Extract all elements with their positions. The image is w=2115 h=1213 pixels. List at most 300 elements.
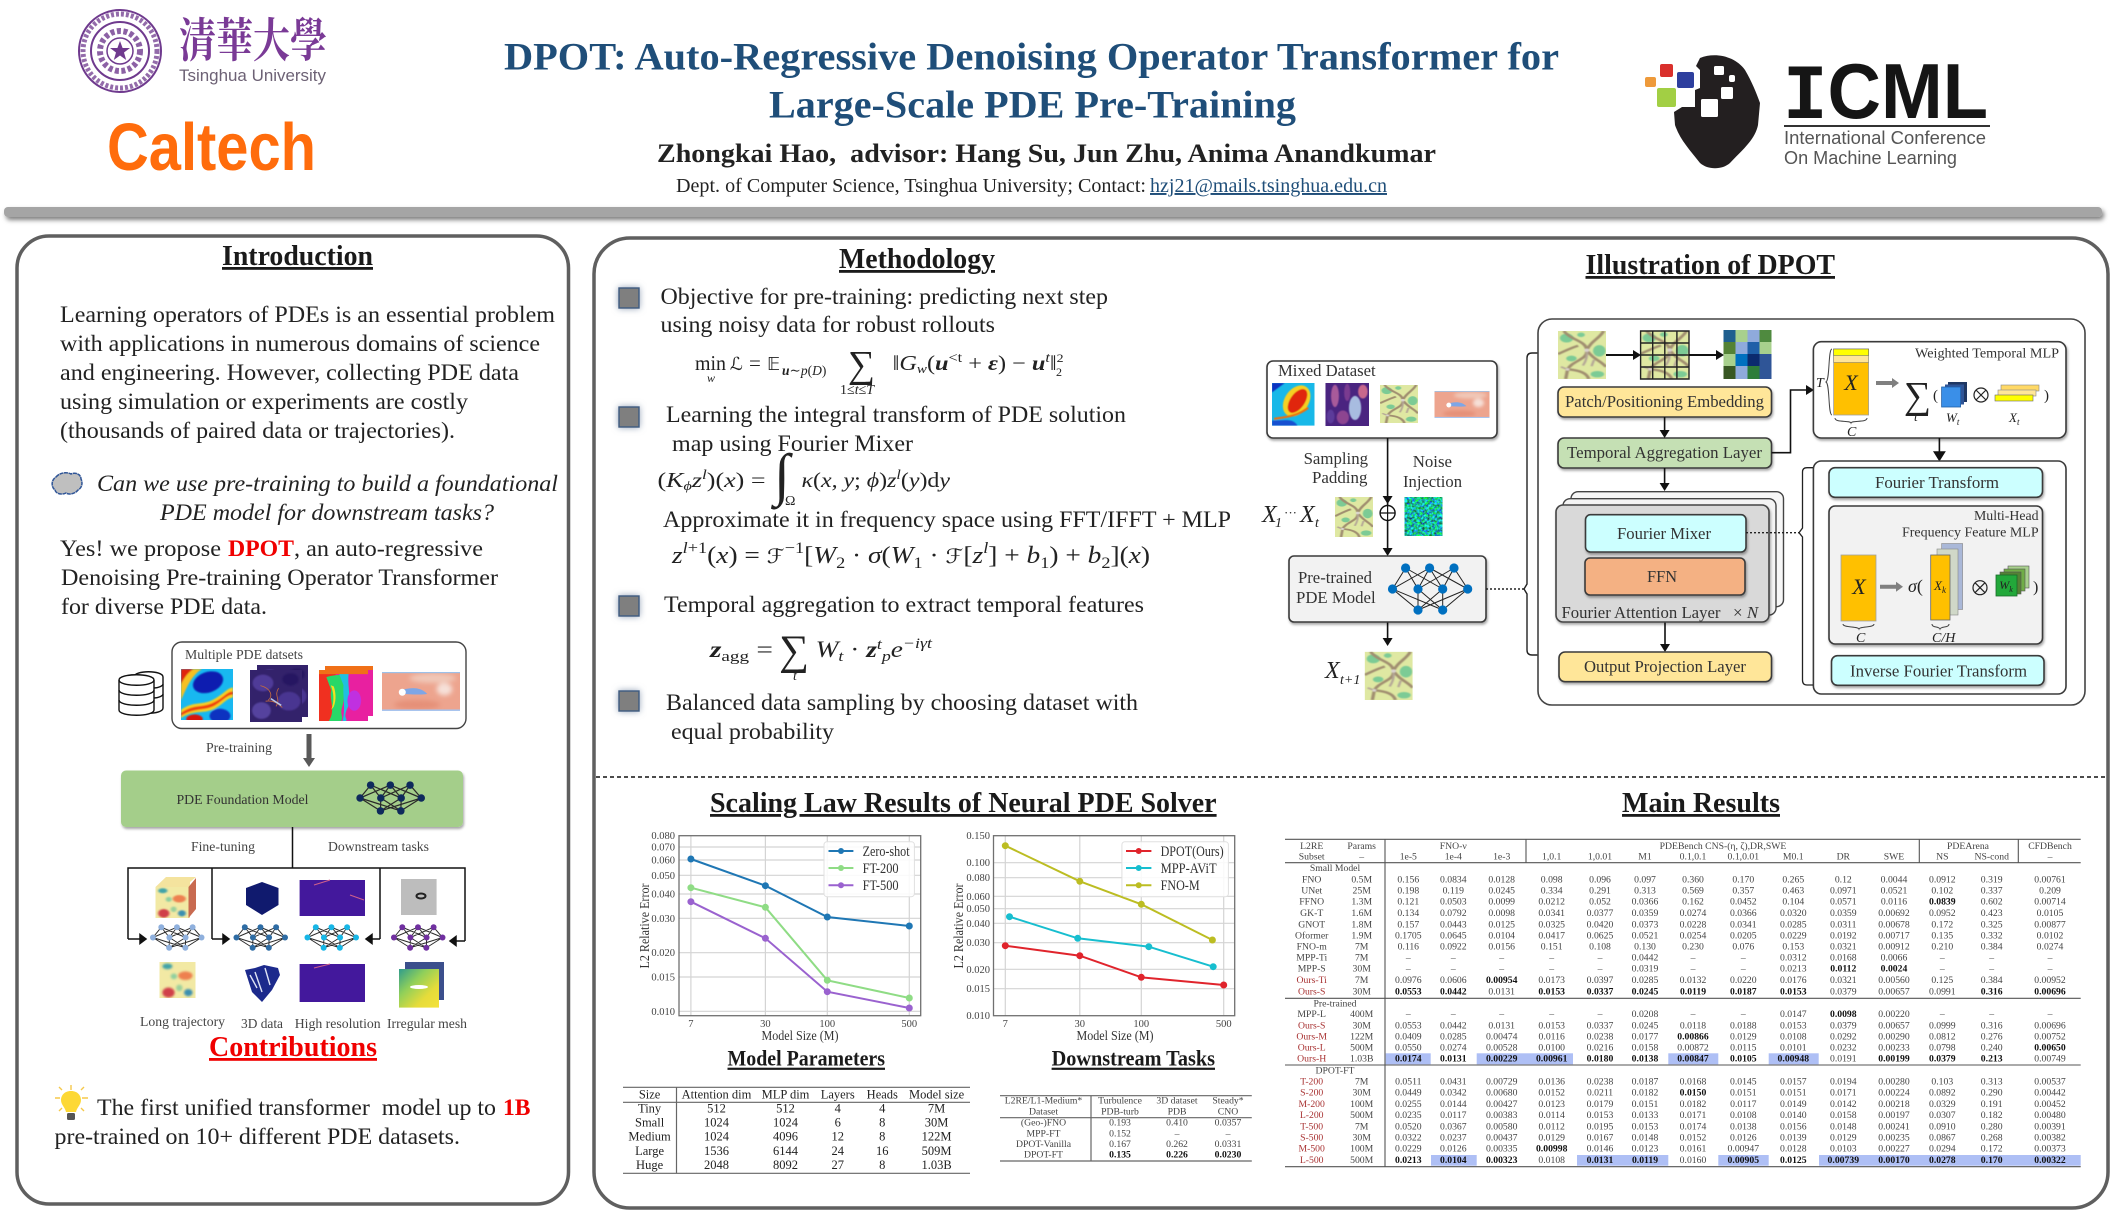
equation: training objective: ( bbox=[927, 351, 935, 375]
line chart: model size vs error, comparison: 0.100 bbox=[966, 858, 990, 869]
table: main results: 0.00322 bbox=[2034, 1155, 2066, 1166]
table: main results: 0.00323 bbox=[1486, 1155, 1518, 1166]
table: main results: 0.0176 bbox=[1780, 975, 1807, 986]
table: main results: 0.0151 bbox=[1780, 1088, 1807, 1099]
box: multi-head frequency feature MLP: C/H bbox=[1932, 631, 1956, 646]
equation: Fourier mixer: ( bbox=[707, 543, 716, 569]
text: research question: PDE model for downstream tasks? bbox=[159, 500, 494, 526]
equation: training objective: ε) − u bbox=[988, 351, 1044, 375]
table: main results: 0.157 bbox=[1397, 919, 1419, 930]
legend: DPOT(Ours) bbox=[1161, 844, 1224, 860]
logo: Caltech: Caltech bbox=[107, 110, 316, 185]
table: main results: 0.0245 bbox=[1488, 886, 1515, 897]
table: main results: 0.0521 bbox=[1881, 886, 1907, 897]
table: main results: 0.153 bbox=[1782, 942, 1804, 953]
table: main results: 0.0238 bbox=[1587, 1077, 1613, 1088]
box: multi-head frequency feature MLP: k bbox=[2009, 585, 2013, 594]
line chart: model size vs error, DPOT variants: 0.020 bbox=[651, 948, 675, 959]
table: main results: 0.325 bbox=[1981, 919, 2003, 930]
box: multi-head frequency feature MLP: W bbox=[1999, 578, 2009, 592]
table: main results: 0.0105 bbox=[2037, 908, 2063, 919]
table: main results: 7M bbox=[1355, 942, 1369, 953]
table: main results: 0.00580 bbox=[1486, 1121, 1518, 1132]
line chart: model size vs error, comparison: 0.080 bbox=[966, 873, 990, 884]
table: main results: 0.0153 bbox=[1538, 986, 1565, 997]
table: main results: 0.0212 bbox=[1538, 897, 1565, 908]
table: main results: 0.0645 bbox=[1440, 931, 1467, 942]
text block: introduction: and engineering. However, collecting PDE data bbox=[60, 360, 520, 386]
task: high resolution: High resolution bbox=[295, 1017, 381, 1032]
table: model parameters: 509M bbox=[922, 1144, 952, 1158]
table: main results: 0.0171 bbox=[1680, 1110, 1706, 1121]
table: main results: 0.0322 bbox=[1395, 1132, 1422, 1143]
box: multi-head frequency feature MLP: ) bbox=[2033, 579, 2038, 596]
table: main results: 0.0129 bbox=[1538, 1132, 1565, 1143]
box: output projection layer: Output Projection Layer bbox=[1584, 657, 1746, 676]
equation: Fourier mixer: 1 bbox=[1040, 555, 1049, 572]
table: main results: 0.172 bbox=[1931, 919, 1953, 930]
table: main results: 1.8M bbox=[1351, 919, 1372, 930]
table: main results: 0.00391 bbox=[2034, 1121, 2066, 1132]
table: main results: 0.0153 bbox=[1538, 1020, 1565, 1031]
table: main results: 0.0133 bbox=[1632, 1110, 1658, 1121]
table: main results: 0.00678 bbox=[1878, 919, 1910, 930]
table: downstream tasks: Turbulence bbox=[1098, 1095, 1142, 1106]
equation: Fourier mixer: ] + bbox=[988, 543, 1027, 569]
table: main results: 0.00480 bbox=[2034, 1110, 2066, 1121]
flow: sampling and noise: X bbox=[1299, 502, 1316, 528]
text block: contribution bbox=[54, 1095, 531, 1150]
table: main results: 0.0100 bbox=[1538, 1042, 1565, 1053]
table: main results: 0.00998 bbox=[1536, 1143, 1568, 1154]
text: International Conference On Machine Learning bbox=[1784, 128, 1986, 168]
table: main results: 0.0208 bbox=[1632, 1009, 1658, 1020]
table: main results: – bbox=[1597, 1009, 1603, 1020]
table: main results: 25M bbox=[1353, 886, 1371, 897]
table: main results: 0.423 bbox=[1981, 908, 2003, 919]
text: integral transform: Learning the integral transform of PDE solution bbox=[666, 402, 1127, 427]
table: main results: 0.0149 bbox=[1780, 1099, 1807, 1110]
line chart: model size vs error, comparison: 0.050 bbox=[966, 904, 990, 915]
equation: kernel integral: ϕ bbox=[684, 478, 692, 493]
table: main results: 0.00952 bbox=[2034, 975, 2066, 986]
table: main results: 0.00714 bbox=[2034, 897, 2066, 908]
table: main results: 500M bbox=[1350, 1110, 1374, 1121]
header divider bar bbox=[4, 207, 2102, 217]
table: main results: L-500 bbox=[1300, 1155, 1324, 1166]
table: main results: 0.00761 bbox=[2034, 874, 2066, 885]
table: main results: DR bbox=[1837, 852, 1851, 863]
series: FT-200 bbox=[688, 885, 912, 1001]
table: main results: 0.0521 bbox=[1632, 931, 1658, 942]
table: main results: 0.00948 bbox=[1778, 1054, 1809, 1065]
table: model parameters: 1.03B bbox=[921, 1158, 952, 1172]
table: main results: 0.0174 bbox=[1680, 1121, 1706, 1132]
table: main results: 0.0131 bbox=[1440, 1054, 1467, 1065]
table: main results: 0.0431 bbox=[1440, 1077, 1467, 1088]
table: main results: 0.0167 bbox=[1587, 1132, 1613, 1143]
table: main results: FNO-m bbox=[1297, 942, 1327, 953]
table: model parameters: 4096 bbox=[773, 1130, 798, 1144]
table: main results: 0.00218 bbox=[1878, 1099, 1910, 1110]
equation: training objective bbox=[695, 344, 1064, 398]
equation: training objective: ℒ bbox=[730, 354, 743, 375]
table: main results: 0.00877 bbox=[2034, 919, 2066, 930]
table: main results: – bbox=[2047, 1009, 2053, 1020]
table: main results: 0.096 bbox=[1589, 874, 1611, 885]
table: main results: 0.00382 bbox=[2034, 1132, 2066, 1143]
table: main results: T-500 bbox=[1300, 1121, 1323, 1132]
table: main results: NS bbox=[1936, 852, 1948, 863]
box: output projection layer bbox=[1559, 652, 1772, 682]
table: main results: MPP-L bbox=[1297, 1009, 1326, 1020]
line chart: model size vs error, DPOT variants: 30 bbox=[760, 1019, 771, 1030]
table: main results: 0.0337 bbox=[1587, 1020, 1613, 1031]
table: main results: 0.0367 bbox=[1440, 1121, 1467, 1132]
table: main results: 0.0098 bbox=[1830, 1009, 1857, 1020]
table: model parameters: 512 bbox=[707, 1102, 726, 1116]
table: main results: 0.00560 bbox=[1878, 975, 1910, 986]
box: temporal aggregation layer: Temporal Aggregation Layer bbox=[1567, 443, 1762, 462]
equation: Fourier mixer: b bbox=[1088, 543, 1101, 569]
table: main results: GK-T bbox=[1300, 908, 1323, 919]
table: main results: 0.0104 bbox=[1488, 931, 1515, 942]
table: main results: 0.00235 bbox=[1878, 1132, 1910, 1143]
table: downstream tasks: 0.167 bbox=[1109, 1139, 1131, 1150]
table: main results: 0.135 bbox=[1931, 931, 1953, 942]
table: main results: 0.0153 bbox=[1632, 1121, 1658, 1132]
table: main results: 0.0792 bbox=[1440, 908, 1467, 919]
title: DPOT: Auto-Regressive Denoising Operator Transformer for bbox=[504, 36, 1559, 78]
table: model parameters: Tiny bbox=[638, 1102, 662, 1116]
table: main results: 1e-4 bbox=[1445, 852, 1462, 863]
heading: Illustration of DPOT: Illustration of DPOT bbox=[1586, 250, 1835, 281]
table: main results: 0.0182 bbox=[1680, 1099, 1706, 1110]
line chart: model size vs error, comparison: 0.015 bbox=[966, 984, 990, 995]
box: multi-head frequency feature MLP bbox=[1829, 506, 2042, 646]
table: main results: 0.103 bbox=[1931, 1077, 1953, 1088]
output frame bbox=[1324, 652, 1413, 700]
table: main results: 0.130 bbox=[1634, 942, 1656, 953]
table: model parameters: Size bbox=[639, 1087, 661, 1101]
table: main results: Ours-M bbox=[1296, 1031, 1327, 1042]
table: main results: 0.00224 bbox=[1878, 1088, 1910, 1099]
line chart: model size vs error, DPOT variants: 0.030 bbox=[651, 914, 675, 925]
box: multi-head frequency feature MLP: Frequency Feature MLP bbox=[1902, 526, 2039, 541]
table: main results: 0.0520 bbox=[1395, 1121, 1422, 1132]
equation: kernel integral: x) = bbox=[724, 468, 760, 492]
table: main results: 0.0148 bbox=[1830, 1121, 1857, 1132]
table: main results: 0.316 bbox=[1981, 1020, 2003, 1031]
table: main results: 0.00227 bbox=[1878, 1143, 1910, 1154]
table: main results: 0.0156 bbox=[1780, 1121, 1807, 1132]
task: long trajectory bbox=[140, 877, 225, 1030]
table: main results: 0.0131 bbox=[1488, 986, 1515, 997]
table: main results: 0.0112 bbox=[1539, 1121, 1565, 1132]
table: main results: 0.00680 bbox=[1486, 1088, 1518, 1099]
table: main results: Small Model bbox=[1310, 863, 1360, 874]
table: main results: 400M bbox=[1350, 1009, 1374, 1020]
table: main results: 0.0229 bbox=[1780, 931, 1807, 942]
table: main results: FNO-ν bbox=[1440, 841, 1467, 852]
table: main results: 0.1705 bbox=[1395, 931, 1422, 942]
equation: training objective: u bbox=[935, 351, 949, 375]
table: main results: 0.170 bbox=[1732, 874, 1754, 885]
equation: training objective: 2 bbox=[1056, 365, 1062, 379]
table: main results: 0.00752 bbox=[2034, 1031, 2066, 1042]
table: main results: 0.00241 bbox=[1878, 1121, 1910, 1132]
box: multi-head frequency feature MLP: Multi-Head bbox=[1974, 509, 2039, 524]
table: main results: 0.00717 bbox=[1878, 931, 1910, 942]
box: Fourier attention layer stack: Fourier Attention Layer bbox=[1562, 603, 1721, 622]
table: main results: 0.0255 bbox=[1395, 1099, 1422, 1110]
box: weighted temporal MLP: X bbox=[2009, 410, 2017, 425]
box: pre-trained PDE model: Pre-trained bbox=[1298, 568, 1372, 587]
table: main results: 0.0115 bbox=[1730, 1042, 1757, 1053]
equation: kernel integral: Ω bbox=[785, 494, 795, 509]
table: main results: 0.116 bbox=[1398, 942, 1419, 953]
line chart: model size vs error, comparison: 0.040 bbox=[966, 919, 990, 930]
table: main results: 0.0321 bbox=[1830, 975, 1857, 986]
table: downstream tasks: DPOT-FT bbox=[1024, 1149, 1063, 1160]
table: main results: 0.134 bbox=[1397, 908, 1419, 919]
table: main results: 1.6M bbox=[1351, 908, 1372, 919]
table: main results: 0.0839 bbox=[1929, 897, 1956, 908]
affiliation and contact bbox=[676, 176, 1387, 197]
table: main results: 0.104 bbox=[1782, 897, 1804, 908]
box: patch positioning embedding: Patch/Positioning Embedding bbox=[1565, 392, 1764, 411]
panel: introduction and contributions bbox=[17, 236, 568, 1204]
heading: Model Parameters: Model Parameters bbox=[728, 1046, 885, 1071]
table: main results: 0.0379 bbox=[1830, 986, 1857, 997]
equation: training objective: min bbox=[695, 351, 726, 375]
table: main results: CFDBench bbox=[2028, 841, 2072, 852]
table: main results: SWE bbox=[1884, 852, 1904, 863]
table: main results: 0.0571 bbox=[1830, 897, 1857, 908]
box: multi-head frequency feature MLP: X bbox=[1934, 578, 1942, 593]
table: main results: Pre-trained bbox=[1313, 998, 1357, 1009]
table: main results: DPOT-FT bbox=[1316, 1066, 1355, 1077]
task: high resolution bbox=[295, 880, 381, 1032]
panel: methodology, illustration and results bbox=[594, 238, 2108, 1208]
table: main results: 500M bbox=[1350, 1042, 1374, 1053]
table: main results: 0.337 bbox=[1981, 886, 2003, 897]
table: main results: 0.276 bbox=[1981, 1031, 2003, 1042]
equation: Fourier mixer: · bbox=[923, 543, 945, 569]
table: main results: 0.00437 bbox=[1486, 1132, 1518, 1143]
box: multi-head frequency feature MLP: σ( bbox=[1908, 576, 1923, 597]
table: main results: 0.268 bbox=[1981, 1132, 2003, 1143]
table: model parameters: 4 bbox=[879, 1102, 886, 1116]
equation: Fourier mixer: 1 bbox=[914, 555, 923, 572]
equation: training objective: u∼p(D) bbox=[782, 363, 826, 378]
equation: training objective: + bbox=[962, 351, 988, 375]
table: main results: 0.0146 bbox=[1587, 1143, 1613, 1154]
table: main results: 0.102 bbox=[1931, 886, 1953, 897]
line chart: model size vs error, comparison: 7 bbox=[1003, 1019, 1008, 1030]
table: main results: 0.0192 bbox=[1830, 931, 1857, 942]
equation: kernel integral: ( bbox=[901, 468, 909, 492]
equation: Fourier mixer: σ(W bbox=[868, 543, 911, 569]
table: main results: 0.0103 bbox=[1830, 1143, 1857, 1154]
equation: Fourier mixer: z bbox=[671, 543, 683, 569]
table: model parameters: 12 bbox=[831, 1130, 844, 1144]
table: main results: 0.108 bbox=[1589, 942, 1611, 953]
table: main results: 0.0379 bbox=[1830, 1020, 1857, 1031]
table: model parameters: 16 bbox=[876, 1144, 889, 1158]
flow: sampling and noise: Injection bbox=[1403, 472, 1462, 491]
table: main results: 0.0128 bbox=[1488, 874, 1515, 885]
output frame: t+1 bbox=[1340, 673, 1360, 688]
text: balanced sampling bbox=[666, 690, 1139, 744]
box: multiple PDE datasets bbox=[172, 642, 466, 728]
table: main results: 1.3M bbox=[1351, 897, 1372, 908]
table: main results: – bbox=[1358, 852, 1364, 863]
table: main results: 0.0892 bbox=[1929, 1088, 1956, 1099]
table: model parameters: 1536 bbox=[704, 1144, 729, 1158]
table: model parameters: Layers bbox=[821, 1087, 855, 1101]
series: Zero-shot bbox=[688, 856, 912, 929]
table: main results: 0.0153 bbox=[1780, 986, 1807, 997]
connector: Fourier Mixer to detail bbox=[1746, 468, 1813, 685]
table: main results: 0.0187 bbox=[1730, 986, 1757, 997]
table: main results: 0.00528 bbox=[1486, 1042, 1518, 1053]
table: main results: 0.0397 bbox=[1587, 975, 1613, 986]
table: main results: 0.0442 bbox=[1632, 953, 1658, 964]
output frame: X bbox=[1324, 658, 1341, 684]
line chart: model size vs error, DPOT variants: 0.070 bbox=[651, 842, 675, 854]
table: main results: – bbox=[1988, 1009, 1994, 1020]
table: main results: Ours-H bbox=[1297, 1054, 1326, 1065]
table: main results: 0.0278 bbox=[1929, 1155, 1956, 1166]
equation: temporal aggregation bbox=[709, 628, 933, 684]
table: downstream tasks bbox=[1000, 1095, 1252, 1161]
legend bbox=[824, 842, 914, 897]
arrow: pre-training: Pre-training bbox=[206, 741, 272, 756]
table: main results: – bbox=[1405, 1009, 1411, 1020]
box: Fourier Transform: Fourier Transform bbox=[1875, 473, 1999, 492]
table: main results: – bbox=[1450, 964, 1456, 975]
table: main results: Ours-Ti bbox=[1297, 975, 1327, 986]
equation: Fourier mixer: 2 bbox=[836, 555, 845, 572]
table: main results: 0.191 bbox=[1981, 1099, 2003, 1110]
text block: contribution: The first unified transformer model up to bbox=[97, 1095, 496, 1121]
line chart: model size vs error, comparison: 0.060 bbox=[966, 892, 990, 903]
table: main results: 0.230 bbox=[1682, 942, 1704, 953]
text: Chinese university name: 清華大學 bbox=[179, 4, 327, 71]
text: DPOT proposal: Denoising Pre-training Operator Transformer bbox=[61, 565, 498, 591]
equation: training objective: w bbox=[707, 371, 715, 385]
table: main results: 0.121 bbox=[1397, 897, 1419, 908]
box: weighted temporal MLP: Weighted Temporal MLP bbox=[1915, 347, 2059, 362]
table: main results: 0.313 bbox=[1634, 886, 1656, 897]
flow: sampling and noise: 1 bbox=[1275, 516, 1282, 531]
table: main results: 0.156 bbox=[1397, 874, 1419, 885]
table: main results: 0.0116 bbox=[1881, 897, 1907, 908]
equation: Fourier mixer: −1 bbox=[785, 540, 804, 557]
table: main results: 1,0.1 bbox=[1542, 852, 1562, 863]
table: main results: 0.0140 bbox=[1780, 1110, 1807, 1121]
table: model parameters: 8 bbox=[879, 1116, 885, 1130]
table: main results: 0.0228 bbox=[1680, 919, 1706, 930]
text: fine-tuning and downstream labels: Fine-tuning bbox=[191, 840, 255, 855]
table: main results: T-200 bbox=[1300, 1077, 1323, 1088]
table: model parameters: 1024 bbox=[704, 1130, 730, 1144]
table: main results: GNOT bbox=[1298, 919, 1325, 930]
table: main results: 0.119 bbox=[1443, 886, 1464, 897]
table: main results: 0.0812 bbox=[1929, 1031, 1956, 1042]
table: main results: 30M bbox=[1353, 1132, 1371, 1143]
table: model parameters: Small bbox=[635, 1116, 665, 1130]
line chart: model size vs error, DPOT variants: 500 bbox=[901, 1019, 917, 1030]
table: main results: L2RE bbox=[1300, 841, 1323, 852]
box: patch positioning embedding bbox=[1558, 387, 1772, 417]
series: DPOT(Ours) bbox=[1002, 943, 1227, 988]
table: main results: 122M bbox=[1350, 1031, 1374, 1042]
text block: introduction: with applications in numerous domains of science bbox=[60, 331, 540, 357]
table: main results: L-200 bbox=[1300, 1110, 1324, 1121]
series: FNO-M bbox=[1002, 843, 1215, 943]
table: main results: 0.0119 bbox=[1680, 986, 1706, 997]
text: objective: Objective for pre-training: predicting next step bbox=[660, 284, 1108, 309]
table: main results: 0.0108 bbox=[1538, 1155, 1565, 1166]
table: main results: Oformer bbox=[1295, 931, 1329, 942]
line chart: model size vs error, DPOT variants bbox=[637, 831, 921, 1043]
equation: temporal aggregation: · bbox=[843, 637, 866, 662]
table: downstream tasks: 0.135 bbox=[1109, 1149, 1131, 1160]
flow: sampling and noise: t bbox=[1315, 516, 1320, 531]
connector: model to architecture bbox=[1486, 353, 1538, 655]
table: main results: 0.00197 bbox=[1878, 1110, 1910, 1121]
table: main results: 0.0098 bbox=[1488, 908, 1515, 919]
table: downstream tasks: MPP-FT bbox=[1027, 1128, 1061, 1139]
table: main results: 0.0128 bbox=[1780, 1143, 1807, 1154]
flow: sampling and noise: Padding bbox=[1312, 468, 1368, 487]
table: main results: 0.0307 bbox=[1929, 1110, 1956, 1121]
legend: FT-500 bbox=[863, 878, 899, 894]
table: main results: 0.0129 bbox=[1730, 1031, 1757, 1042]
table: main results: 0.0142 bbox=[1830, 1099, 1857, 1110]
table: model parameters bbox=[623, 1087, 970, 1173]
equation: temporal aggregation: z bbox=[865, 637, 877, 662]
table: main results: 0.00749 bbox=[2034, 1054, 2066, 1065]
equation: kernel integral: y)dy bbox=[909, 468, 949, 492]
table: main results: 0.1,0.1 bbox=[1680, 852, 1706, 863]
table: main results: 30M bbox=[1353, 964, 1371, 975]
table: main results: 0.00452 bbox=[2034, 1099, 2066, 1110]
table: main results: 7M bbox=[1355, 975, 1369, 986]
heading: Scaling Law Results of Neural PDE Solver: Scaling Law Results of Neural PDE Solver bbox=[710, 788, 1217, 819]
table: main results: 0.00696 bbox=[2034, 986, 2066, 997]
box: Fourier attention layer stack: × N bbox=[1733, 603, 1760, 622]
table: main results: 0.00220 bbox=[1878, 1009, 1910, 1020]
heading: Downstream Tasks: Downstream Tasks bbox=[1052, 1046, 1215, 1071]
table: model parameters: 27 bbox=[831, 1158, 844, 1172]
table: main results: 0.0101 bbox=[1780, 1042, 1807, 1053]
table: main results: 0.0359 bbox=[1830, 908, 1857, 919]
table: main results: 0.00650 bbox=[2034, 1042, 2066, 1053]
box: weighted temporal MLP: T bbox=[1816, 376, 1825, 391]
arrow: temporal MLP to Fourier block bbox=[1934, 438, 1944, 460]
table: main results: 0.332 bbox=[1981, 931, 2003, 942]
table: downstream tasks: 0.0331 bbox=[1215, 1139, 1241, 1150]
table: main results: – bbox=[1690, 953, 1696, 964]
table: main results: 0.0116 bbox=[1539, 1031, 1565, 1042]
box: weighted temporal MLP bbox=[1813, 342, 2066, 440]
table: main results: – bbox=[1988, 964, 1994, 975]
table: main results: 0.0123 bbox=[1538, 1099, 1565, 1110]
table: main results: 0.0245 bbox=[1632, 986, 1658, 997]
